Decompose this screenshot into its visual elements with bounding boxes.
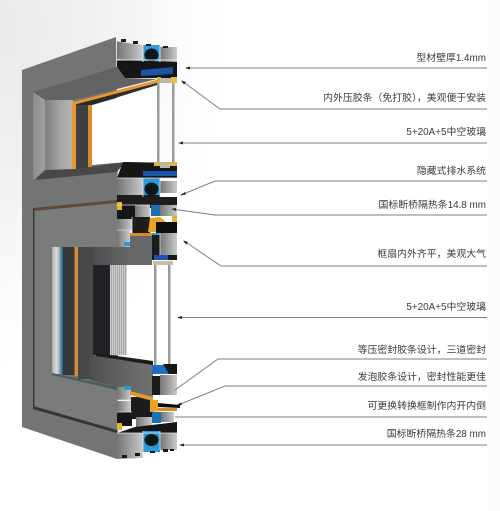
inner frame bottom band (90, 355, 153, 397)
sash groove line (33, 200, 117, 211)
leader: pressure strip (182, 81, 487, 109)
sash outer shadow left (33, 208, 34, 407)
white web lines (117, 41, 177, 62)
sill yellow bead (154, 162, 177, 166)
label: thermal strip 28: 国标断桥隔热条28 mm (387, 427, 486, 440)
yellow edge bead (117, 423, 122, 430)
dark frame strip (78, 247, 93, 379)
sash silver chamber centre (135, 205, 150, 217)
arrow: flush frame (183, 240, 188, 244)
thermal chamber (143, 178, 160, 197)
frame front face (22, 37, 118, 459)
glass panes lower (154, 262, 170, 366)
inner frame bottom black edge (96, 353, 153, 365)
silver chamber right (160, 47, 177, 62)
upper recess underside (33, 67, 157, 100)
arrow: upper glass (178, 142, 183, 144)
silver centre chamber (136, 417, 152, 427)
label: equal pressure seal: 等压密封胶条设计，三道密封 (358, 343, 486, 356)
silver chamber right of insert (160, 205, 177, 216)
leader: thermal strip 28 (180, 444, 487, 446)
label: foam strip: 发泡胶条设计，密封性能更佳 (358, 370, 486, 383)
leader: flush frame (184, 241, 487, 266)
label: thermal strip 14.8: 国标断桥隔热条14.8 mm (378, 198, 486, 211)
silver chamber lower right (160, 233, 177, 255)
black sash chamber middle (131, 397, 153, 419)
leader: replaceable frame (175, 416, 487, 418)
insect mesh (110, 265, 127, 355)
leader: wall thickness (186, 67, 487, 69)
thermal break core (144, 48, 158, 62)
orange bar (130, 233, 152, 236)
dark strip (62, 247, 74, 375)
sill spacer (160, 163, 170, 168)
labels (323, 51, 486, 440)
orange connector (148, 217, 166, 232)
white web lines (117, 400, 177, 455)
upper recess sill (35, 162, 125, 180)
frame feet (122, 449, 174, 458)
bottom cross-section (117, 364, 180, 459)
left sash silver chamber (117, 387, 131, 400)
upper recess back wall (45, 100, 73, 170)
upper window glass opening (92, 87, 157, 165)
sash silver chamber 2 (117, 401, 131, 412)
orange thermal strip vertical right (88, 105, 92, 168)
arrow: lower glass (177, 316, 182, 319)
black chamber blue trim (152, 233, 161, 235)
label: lower glass: 5+20A+5中空玻璃 (406, 300, 486, 313)
sill blue gasket (143, 171, 177, 176)
jamb light strip (52, 247, 61, 374)
sash black chamber (117, 412, 132, 426)
orange thermal strip horizontal (73, 80, 157, 105)
pane outer (154, 262, 156, 366)
blue corner (124, 386, 131, 390)
inner opening strips (52, 247, 127, 379)
orange connector (150, 400, 162, 412)
sash top blue gasket (152, 365, 177, 374)
opening top band (93, 247, 152, 265)
callouts (172, 68, 487, 445)
silver chamber right (160, 375, 177, 395)
label: wall thickness: 型材壁厚1.4mm (416, 51, 486, 64)
arrow: wall thickness (185, 66, 190, 70)
dark junction row (117, 195, 177, 208)
label: pressure strip: 内外压胶条（免打胶），美观便于安装 (323, 91, 486, 104)
white web lines (117, 178, 177, 255)
arrow: foam strip (176, 402, 182, 406)
yellow edge bead (117, 202, 122, 210)
right margin tint (488, 0, 500, 511)
middle cross-section (117, 162, 177, 265)
black bar (158, 403, 180, 408)
glass spacer (160, 78, 171, 83)
silver chamber frame left (117, 433, 143, 459)
sash lower shadow (33, 406, 117, 433)
black vertical chamber (152, 233, 161, 255)
chamber core (144, 434, 158, 446)
top frame cross-section (117, 39, 177, 83)
sash black chamber lower (132, 217, 150, 234)
leader: drainage (181, 181, 487, 195)
yellow edge right (172, 216, 177, 222)
pane outer (157, 78, 160, 168)
silver chamber frame right (160, 433, 177, 450)
black row lower (152, 255, 177, 260)
glass panes upper (157, 78, 174, 168)
chamber sash grey face (130, 236, 152, 265)
blue chamber (152, 412, 161, 423)
silver chamber right (160, 181, 177, 193)
label: upper glass: 5+20A+5中空玻璃 (406, 125, 486, 138)
arrow: pressure strip (181, 80, 186, 84)
arrow: thermal strip 28 (179, 444, 184, 446)
blue gasket (141, 67, 173, 76)
arrow: drainage (180, 192, 186, 196)
window cutaway illustration (22, 37, 180, 459)
orange lower bar (158, 408, 177, 411)
blue gasket line (60, 247, 62, 374)
arrow: thermal strip 14.8 (171, 208, 176, 211)
pane inner (172, 78, 174, 168)
leader: lower glass (178, 316, 487, 318)
thermal core (144, 182, 158, 196)
black top corner (163, 364, 177, 374)
sash black chamber (117, 205, 135, 219)
small blue insert (151, 205, 160, 216)
upper frame dark column (74, 102, 91, 169)
orange thermal strip vertical left (72, 102, 76, 169)
dark vertical chamber (152, 376, 160, 395)
orange strip (74, 247, 78, 376)
tan bead (153, 261, 173, 265)
silver chamber left (117, 178, 143, 195)
sash face (34, 203, 117, 430)
silver stub left (117, 230, 130, 247)
silver chamber right mid (161, 412, 174, 422)
white area notch (160, 193, 177, 197)
black chamber row (117, 60, 177, 78)
black row (117, 422, 177, 433)
sash silver lower left (117, 219, 132, 230)
blue gasket lower (154, 255, 168, 260)
blue corner (124, 242, 131, 246)
inner frame black strip (93, 265, 110, 355)
arrow heads (171, 66, 190, 446)
blue chamber frame (143, 431, 160, 452)
silver chamber left (117, 41, 143, 61)
sill black chamber row (117, 162, 177, 178)
label: drainage: 隐藏式排水系统 (417, 164, 486, 177)
feet (121, 39, 168, 48)
leader: thermal strip 14.8 (172, 209, 487, 215)
upper frame top dark band (74, 80, 157, 105)
leader: equal pressure seal (175, 359, 487, 390)
label: replaceable frame: 可更换转换框制作内开内倒 (367, 399, 486, 412)
yellow glazing bead (157, 77, 161, 83)
opening bottom sill (52, 373, 117, 390)
upper recess left jamb (33, 92, 45, 180)
leader: upper glass (180, 142, 487, 144)
sash black right (156, 222, 177, 233)
thermal break chamber (143, 45, 160, 63)
orange bar (130, 391, 153, 401)
label: flush frame: 框扇内外齐平，美观大气 (377, 247, 486, 260)
pane inner (168, 262, 170, 366)
leader: foam strip (178, 386, 487, 405)
yellow glazing bead right (171, 77, 177, 83)
